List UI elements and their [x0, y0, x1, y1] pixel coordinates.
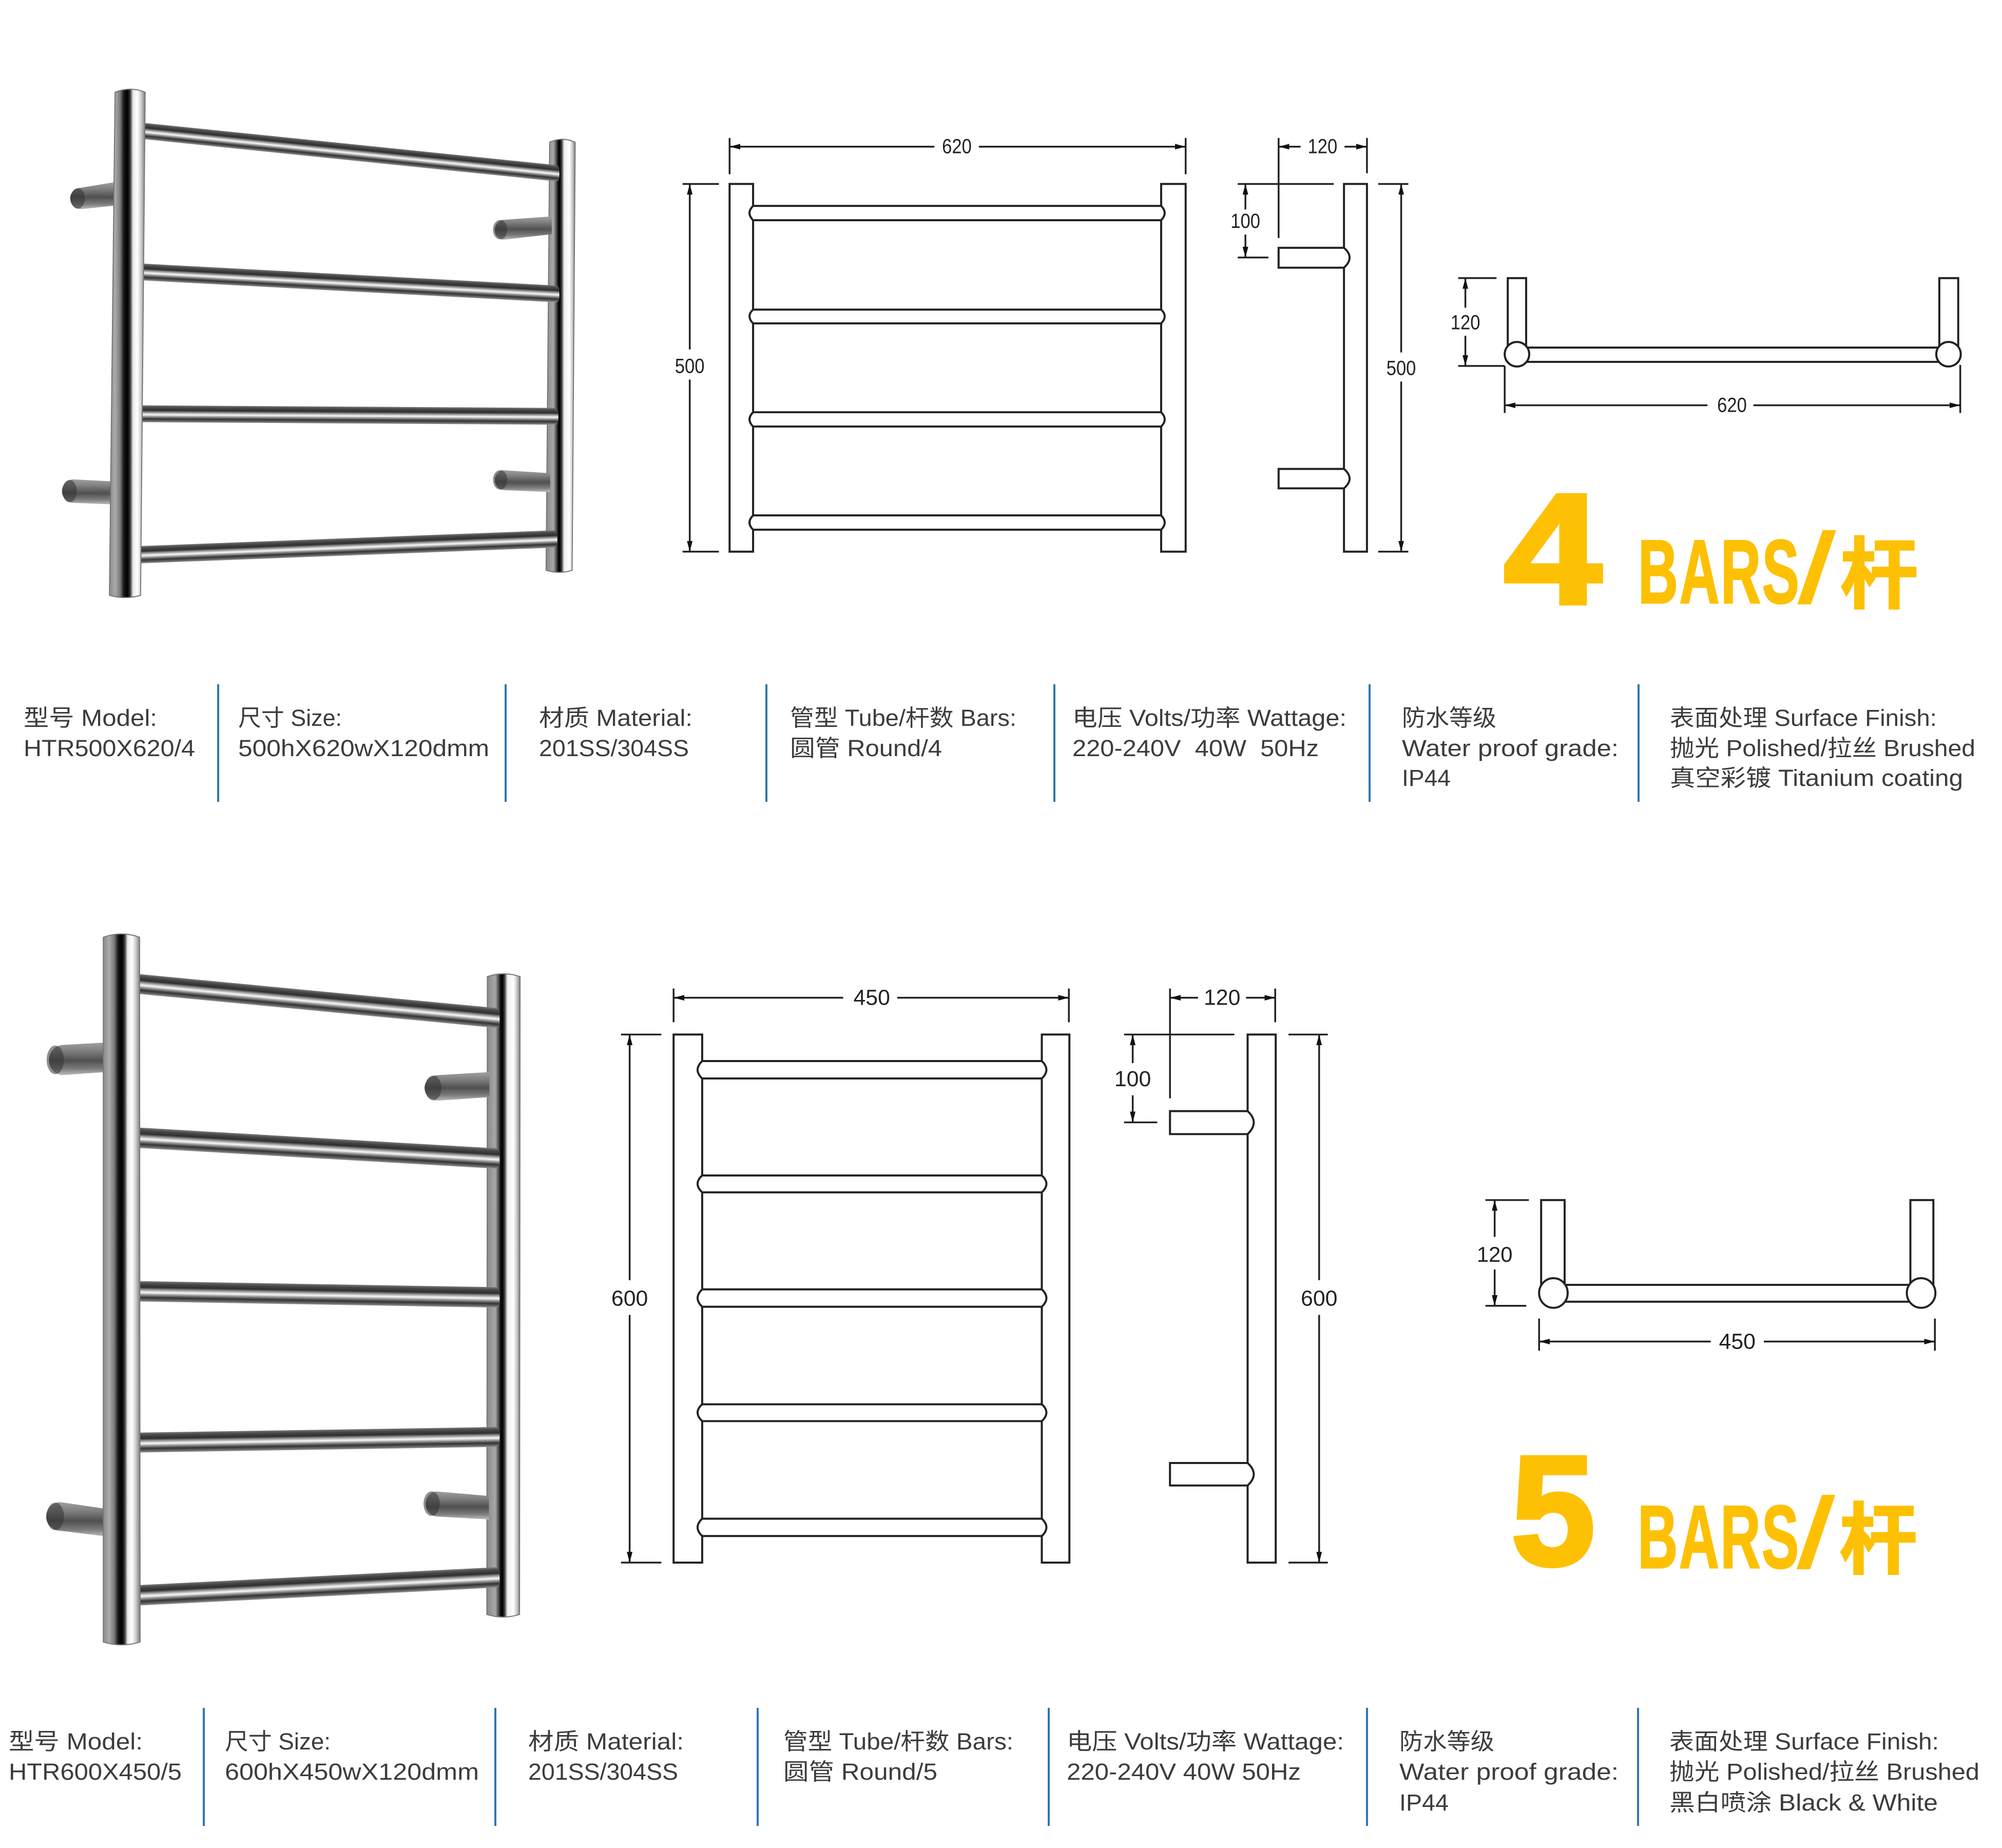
- spec: tube and bars: [783, 1728, 1013, 1785]
- spec: waterproof grade: Water proof grade:: [1402, 735, 1619, 761]
- panel: 4 bar top drawing: [1451, 278, 1961, 417]
- spec: tube and bars: 管型 Tube/杆数 Bars:: [783, 1728, 1013, 1755]
- side pegs: [1279, 248, 1350, 488]
- depth dimension 120: [1170, 986, 1275, 1099]
- right rail: [1042, 1034, 1069, 1563]
- spec: material: 201SS/304SS: [539, 735, 689, 761]
- spec: waterproof grade: Water proof grade:: [1399, 1759, 1619, 1785]
- wall pegs right: [493, 216, 552, 492]
- width dimension 450: [1539, 1319, 1935, 1354]
- top view rails and bar: [1505, 278, 1961, 367]
- spec: surface finish: 抛光 Polished/拉丝 Brushed: [1670, 735, 1975, 761]
- offset dimension 100: [1114, 1034, 1235, 1122]
- spec: model: [9, 1728, 182, 1785]
- spec: model: 型号 Model:: [9, 1728, 143, 1755]
- depth dimension 120: 120: [1477, 1242, 1513, 1266]
- spec: tube and bars: 圆管 Round/5: [783, 1759, 937, 1785]
- offset dimension 100: [1230, 184, 1334, 258]
- spec: waterproof grade: 防水等级: [1399, 1728, 1494, 1755]
- spec: material: 材质 Material:: [528, 1728, 684, 1755]
- spec: voltage and wattage: 电压 Volts/功率 Wattage:: [1067, 1728, 1344, 1755]
- top view rails and bar: [1539, 1200, 1935, 1308]
- panel: 5 bar top drawing: [1477, 1200, 1935, 1354]
- spec: model: [24, 705, 195, 761]
- divider lines: [204, 1708, 1638, 1826]
- spec: material: [528, 1728, 684, 1785]
- towel bars: [134, 122, 560, 564]
- spec: size: 500hX620wX120dmm: [238, 735, 489, 761]
- height dimension 500: [1378, 184, 1416, 552]
- width dimension 620: 620: [1717, 394, 1747, 417]
- width dimension 450: [673, 986, 1069, 1022]
- height dimension 500: 500: [1387, 357, 1416, 380]
- left tube: [103, 934, 140, 1645]
- height dimension 500: [675, 184, 719, 552]
- height dimension 600: 600: [1301, 1286, 1337, 1311]
- width dimension 620: [1505, 365, 1960, 417]
- width dimension 450: 450: [1719, 1329, 1756, 1354]
- panel: 4 bar front drawing: [675, 136, 1186, 552]
- spec: surface finish: 抛光 Polished/拉丝 Brushed: [1669, 1759, 1979, 1785]
- spec: voltage and wattage: 220-240V 40W 50Hz: [1072, 735, 1319, 761]
- spec: model: HTR500X620/4: [24, 735, 195, 761]
- panel: 5 bar product photo: [46, 934, 520, 1645]
- heading: 4 bars: 4: [1504, 461, 1603, 637]
- spec: waterproof grade: [1399, 1728, 1619, 1816]
- heading: 4 bars: 杆: [1840, 532, 1918, 619]
- panel: 5 bar specification row: [9, 1708, 1979, 1826]
- side pegs: [1170, 1111, 1254, 1486]
- left rail: [673, 1034, 702, 1563]
- height dimension 600: [1288, 1034, 1337, 1563]
- panel: 5 bar side drawing: [1114, 986, 1337, 1563]
- width dimension 620: 620: [942, 136, 972, 158]
- side rail: [1344, 184, 1367, 552]
- left tube: [109, 89, 145, 598]
- spec: model: 型号 Model:: [24, 705, 157, 731]
- spec: size: [225, 1728, 479, 1785]
- height dimension 600: 600: [611, 1286, 648, 1311]
- spec: voltage and wattage: 电压 Volts/功率 Wattage:: [1072, 705, 1346, 731]
- width dimension 620: [729, 136, 1186, 174]
- spec: waterproof grade: IP44: [1402, 765, 1451, 791]
- spec: material: [539, 705, 692, 761]
- wall pegs left: [46, 1043, 105, 1536]
- spec: waterproof grade: [1402, 705, 1619, 791]
- spec: size: [238, 705, 489, 761]
- panel: 4 bar product photo: [62, 89, 575, 598]
- width dimension 450: 450: [854, 986, 890, 1010]
- spec: model: HTR600X450/5: [9, 1759, 182, 1785]
- spec: surface finish: [1669, 1728, 1979, 1816]
- depth dimension 120: [1477, 1200, 1529, 1306]
- wall pegs right: [424, 1072, 489, 1519]
- heading: 5 bars: BARS: [1638, 1487, 1800, 1587]
- right tube: [487, 974, 520, 1617]
- heading: 5 bars: 杆: [1839, 1497, 1917, 1584]
- spec: tube and bars: [790, 705, 1016, 761]
- spec: voltage and wattage: [1067, 1728, 1344, 1785]
- spec: material: 201SS/304SS: [528, 1759, 678, 1785]
- bar outlines: [749, 206, 1165, 530]
- offset dimension 100: 100: [1114, 1067, 1151, 1091]
- spec: surface finish: 表面处理 Surface Finish:: [1670, 705, 1937, 731]
- spec: voltage and wattage: [1072, 705, 1346, 761]
- panel: 5 bar front drawing: [611, 986, 1069, 1563]
- depth dimension 120: [1279, 136, 1367, 238]
- depth dimension 120: 120: [1308, 136, 1337, 158]
- right tube: [546, 139, 575, 572]
- heading: 4 bars: [1504, 461, 1918, 637]
- spec: material: 材质 Material:: [539, 705, 692, 731]
- heading: 4 bars: BARS: [1638, 522, 1800, 623]
- spec: surface finish: [1670, 705, 1975, 791]
- spec: surface finish: 真空彩镀 Titanium coating: [1670, 765, 1963, 791]
- spec: tube and bars: 管型 Tube/杆数 Bars:: [790, 705, 1016, 731]
- spec: tube and bars: 圆管 Round/4: [790, 735, 942, 761]
- heading: 5 bars: 5: [1511, 1423, 1595, 1598]
- height dimension 600: [611, 1034, 661, 1563]
- heading: 4 bars: /: [1800, 515, 1834, 623]
- spec: waterproof grade: IP44: [1399, 1789, 1449, 1816]
- side rail: [1247, 1034, 1276, 1563]
- depth dimension 120: 120: [1204, 986, 1240, 1010]
- heading: 5 bars: /: [1799, 1479, 1833, 1588]
- right rail: [1161, 184, 1186, 552]
- bar outlines: [698, 1061, 1046, 1536]
- offset dimension 100: 100: [1230, 210, 1260, 233]
- height dimension 500: 500: [675, 355, 705, 378]
- depth dimension 120: 120: [1451, 311, 1480, 334]
- spec: surface finish: 黑白喷涂 Black & White: [1669, 1789, 1938, 1816]
- left rail: [729, 184, 753, 552]
- spec: voltage and wattage: 220-240V 40W 50Hz: [1067, 1759, 1301, 1785]
- spec: waterproof grade: 防水等级: [1402, 705, 1496, 731]
- divider lines: [218, 684, 1639, 802]
- panel: 4 bar side drawing: [1230, 136, 1416, 552]
- depth dimension 120: [1451, 278, 1505, 366]
- panel: 4 bar specification row: [24, 684, 1975, 802]
- spec: size: 600hX450wX120dmm: [225, 1759, 479, 1785]
- heading: 5 bars: [1511, 1423, 1917, 1598]
- towel bars: [133, 974, 499, 1606]
- spec: size: 尺寸 Size:: [238, 705, 342, 731]
- spec: surface finish: 表面处理 Surface Finish:: [1669, 1728, 1939, 1755]
- wall pegs left: [62, 182, 115, 505]
- spec: size: 尺寸 Size:: [225, 1728, 331, 1755]
